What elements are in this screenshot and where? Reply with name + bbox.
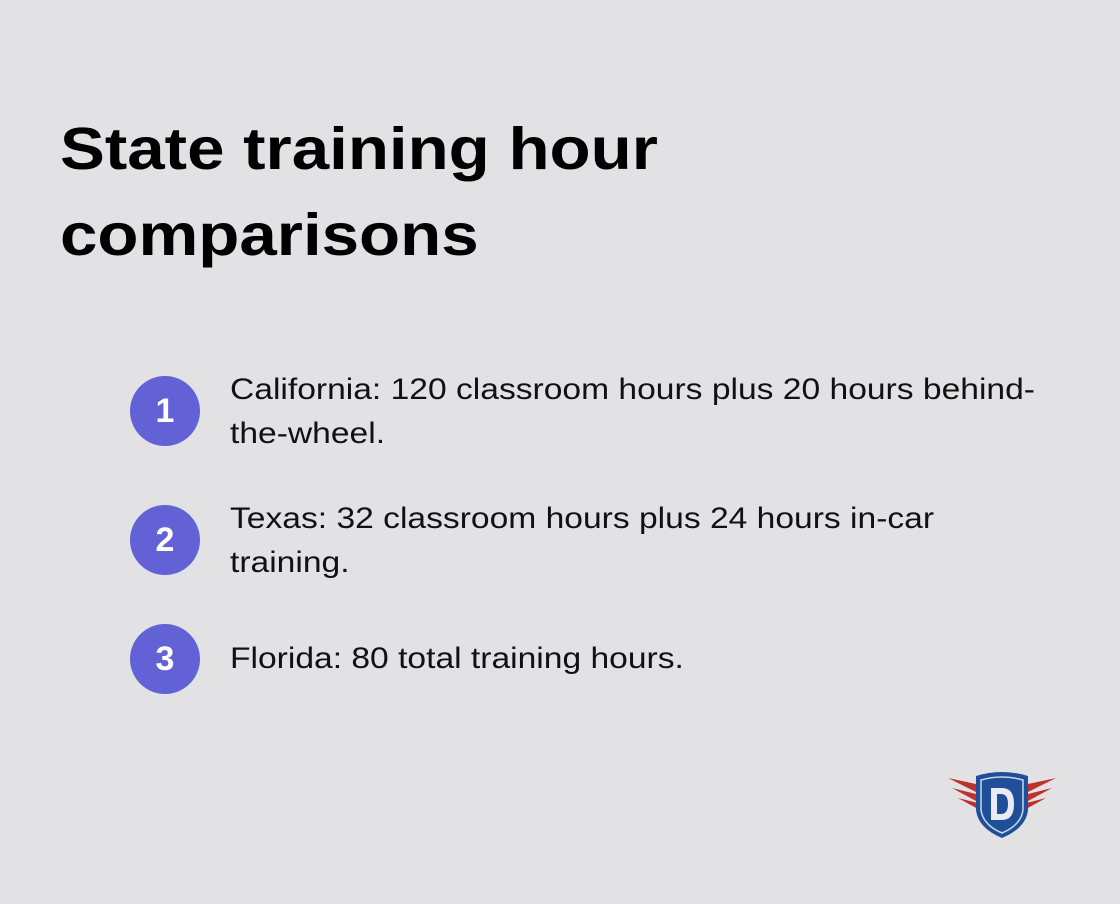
badge 3	[130, 624, 200, 694]
text 2: Texas: 32 classroom hours plus 24 hours in-car	[230, 502, 934, 535]
text 1	[230, 373, 1035, 450]
text 2: training.	[230, 546, 350, 579]
badge 1: 1	[156, 392, 174, 430]
badge 1	[130, 376, 200, 446]
item 3	[130, 624, 684, 694]
text 2	[230, 502, 934, 579]
title	[60, 116, 658, 268]
badge 3: 3	[156, 640, 174, 678]
badge 2	[130, 505, 200, 575]
icon: logo shield with wings	[948, 772, 1056, 838]
title: comparisons	[60, 202, 479, 268]
item 1	[130, 373, 1035, 450]
title: State training hour	[60, 116, 658, 182]
item 2	[130, 502, 934, 579]
badge 2: 2	[156, 521, 174, 559]
text 1: the-wheel.	[230, 417, 385, 450]
text 3: Florida: 80 total training hours.	[230, 642, 684, 675]
text 1: California: 120 classroom hours plus 20 hours behind-	[230, 373, 1035, 406]
